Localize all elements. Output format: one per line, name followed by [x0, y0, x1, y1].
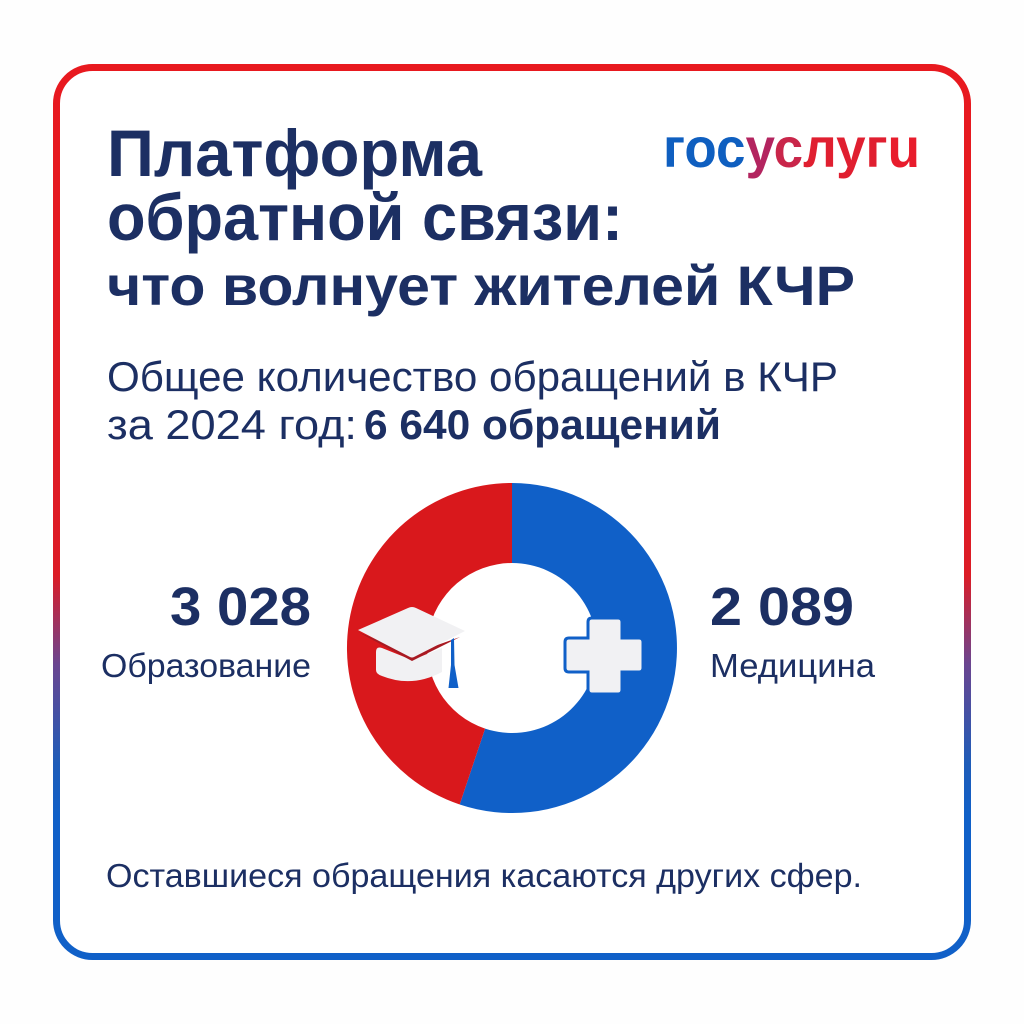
- stat: education: [101, 577, 311, 684]
- donut chart: [347, 483, 677, 813]
- footer note: Оставшиеся обращения касаются других сфер.: [106, 857, 862, 894]
- icon: graduation cap: [358, 607, 465, 688]
- panel: gradient frame: [56, 68, 968, 956]
- title: что волнует жителей КЧР: [107, 254, 855, 317]
- stat: education: Образование: [101, 647, 311, 684]
- stat: medicine: Медицина: [710, 647, 876, 684]
- title: Платформа: [107, 116, 483, 190]
- icon: medical cross: [565, 618, 643, 694]
- logo: gosuslugi: госуслугu: [663, 116, 920, 179]
- segment: education: [347, 483, 512, 804]
- title: [107, 116, 855, 317]
- subtitle: total requests: [107, 353, 838, 448]
- subtitle: total requests: за 2024 год:: [107, 401, 357, 448]
- title: обратной связи:: [107, 180, 623, 254]
- subtitle: total requests: Общее количество обращений в КЧР: [107, 353, 838, 400]
- stat: education: 3 028: [170, 577, 311, 637]
- segment: medicine: [460, 483, 677, 813]
- stat: medicine: [710, 577, 876, 684]
- stat: medicine: 2 089: [710, 577, 854, 637]
- subtitle: total requests: 6 640 обращений: [364, 401, 721, 448]
